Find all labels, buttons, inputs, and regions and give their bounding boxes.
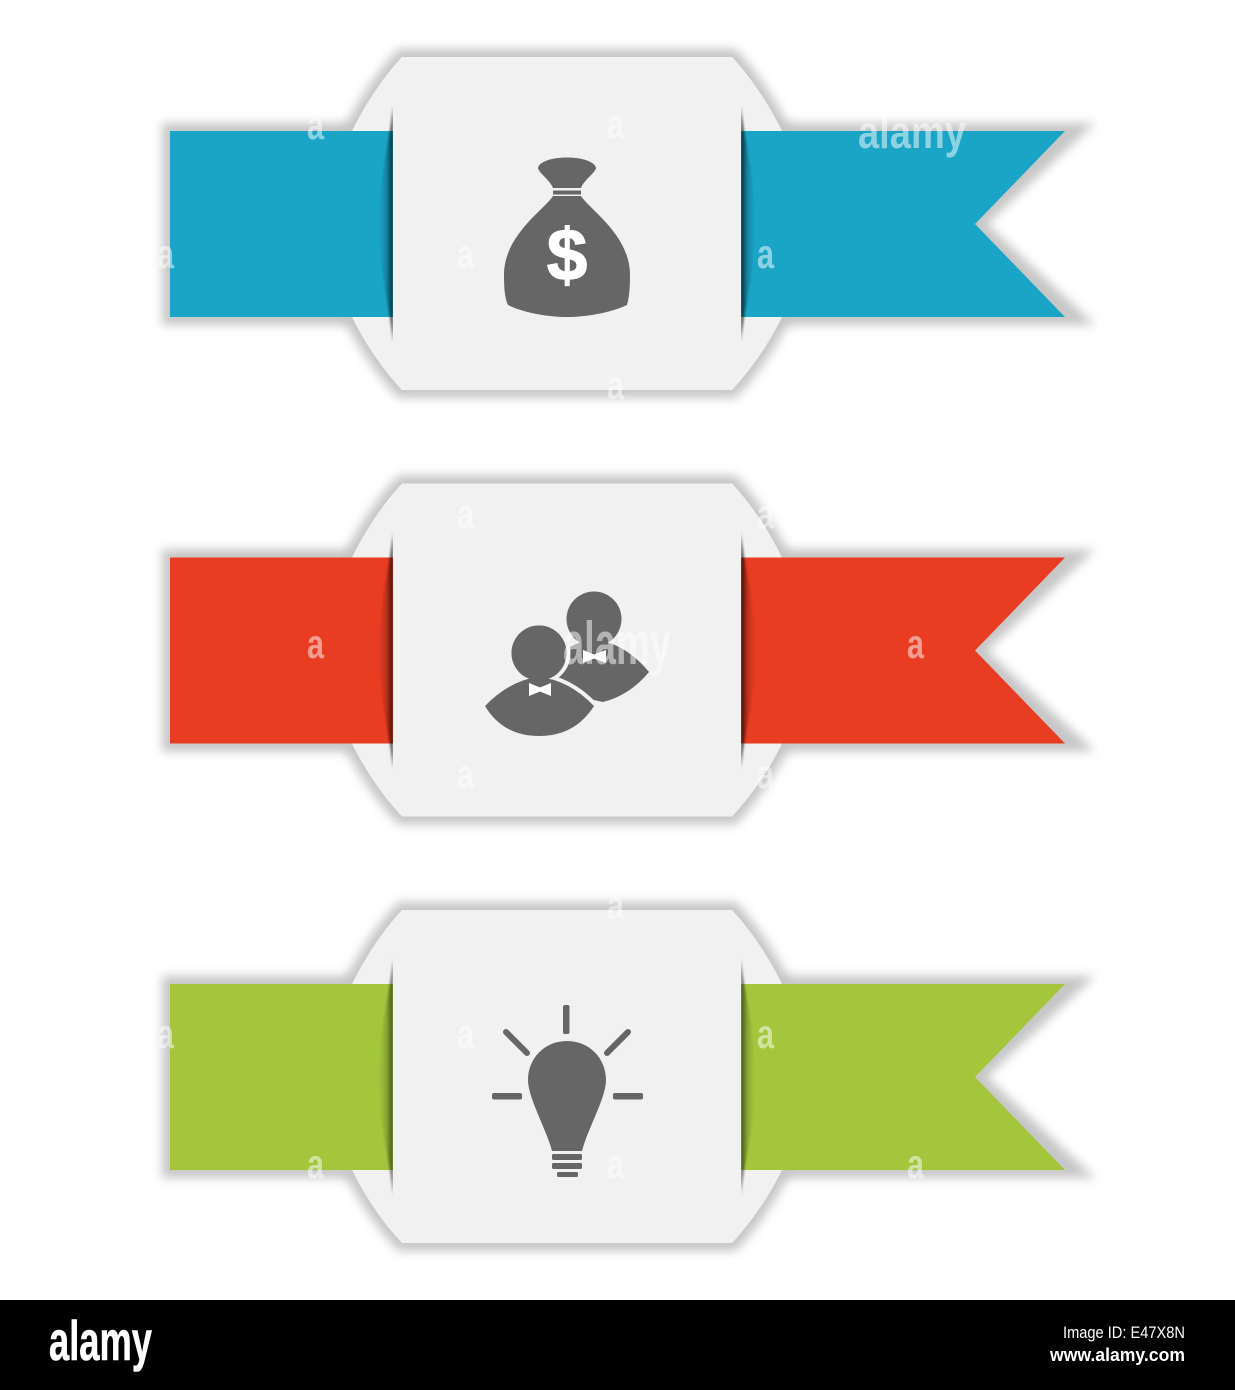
fold shadow right — [741, 106, 755, 342]
watermark letters: a — [457, 231, 475, 277]
red ribbon — [170, 558, 1065, 744]
watermark letters: a — [607, 882, 625, 928]
card shadow — [345, 57, 789, 390]
watermark letters: a — [307, 621, 325, 667]
blue ribbon — [170, 131, 1065, 317]
card wings — [345, 910, 789, 1243]
fold shadow left — [379, 532, 393, 768]
watermark letters — [157, 101, 925, 1187]
icon: money bag: $ — [547, 215, 587, 296]
watermark letters: a — [757, 491, 775, 537]
footer bar — [0, 1300, 1235, 1390]
card face — [393, 57, 741, 390]
fold shadow left — [379, 959, 393, 1195]
watermark letters: a — [757, 231, 775, 277]
watermark letters: a — [607, 1141, 625, 1187]
fold shadow right — [741, 959, 755, 1195]
watermark letters: a — [607, 362, 625, 408]
card wings — [345, 57, 789, 390]
image id: Image ID: E47X8N — [1063, 1323, 1185, 1342]
watermark letters: a — [157, 231, 175, 277]
watermark letters: a — [157, 1011, 175, 1057]
watermark: alamy on people icon: alamy — [563, 610, 671, 677]
watermark letters: a — [607, 101, 625, 147]
panel: blue money banner — [162, 57, 1095, 390]
watermark: alamy on blue ribbon: alamy — [858, 106, 966, 158]
ribbon shadow — [162, 123, 1095, 325]
panel: green idea banner — [162, 910, 1095, 1243]
card face — [393, 910, 741, 1243]
panel: red people banner — [162, 484, 1095, 816]
website: www.alamy.com — [1049, 1345, 1185, 1365]
card shadow — [345, 910, 789, 1243]
watermark letters: a — [457, 751, 475, 797]
icon: two people with bow ties — [485, 592, 649, 736]
watermark letters: a — [457, 491, 475, 537]
watermark letters: a — [757, 751, 775, 797]
ribbon shadow — [162, 976, 1095, 1178]
card shadow — [345, 484, 789, 816]
watermark letters: a — [907, 1141, 925, 1187]
watermark letters: a — [307, 102, 325, 148]
watermark letters: a — [757, 1011, 775, 1057]
ribbon shadow — [162, 550, 1095, 752]
icon: money bag — [504, 158, 630, 317]
card face — [393, 484, 741, 816]
fold shadow right — [741, 532, 755, 768]
watermark letters: a — [907, 621, 925, 667]
card wings — [345, 484, 789, 816]
watermark letters: a — [457, 1011, 475, 1057]
icon: light bulb — [492, 1005, 643, 1177]
green ribbon — [170, 984, 1065, 1170]
fold shadow left — [379, 106, 393, 342]
watermark letters: a — [307, 1141, 325, 1187]
footer logo: alamy — [49, 1309, 152, 1372]
